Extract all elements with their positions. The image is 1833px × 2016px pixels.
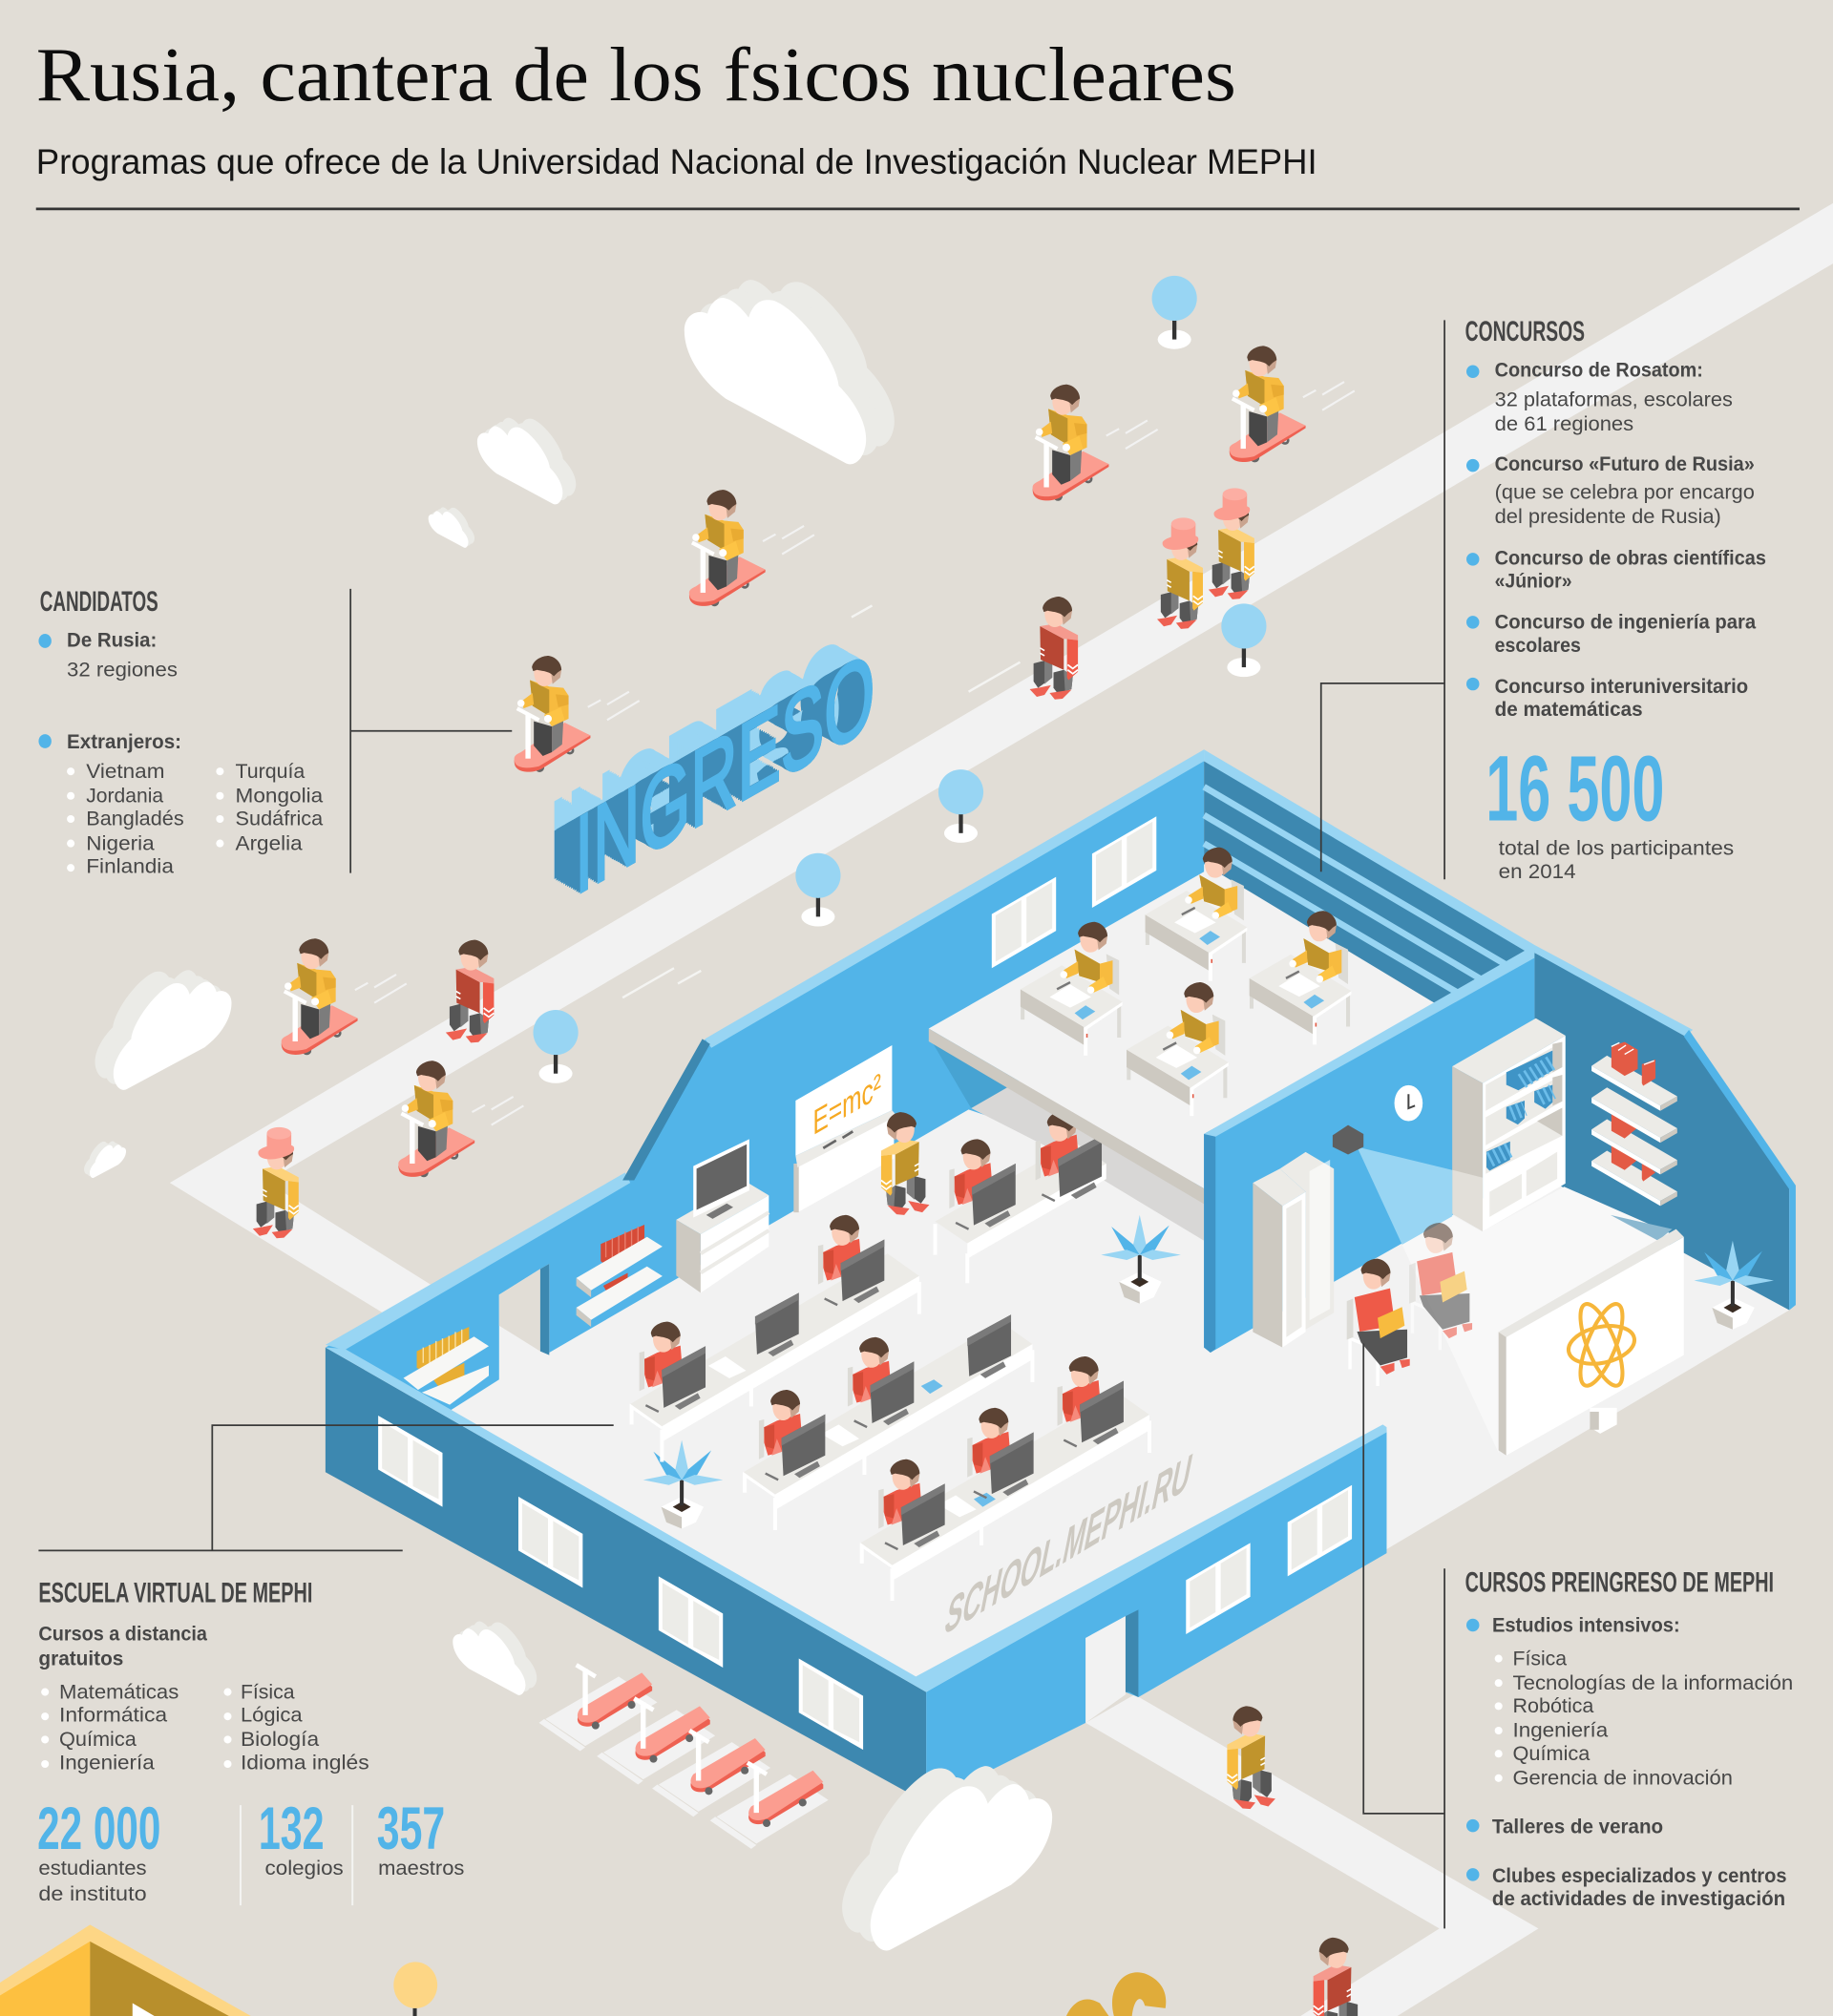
subject bullets xyxy=(1495,1655,1503,1782)
country list: Vietnam xyxy=(86,759,164,783)
intro: gratuitos xyxy=(38,1646,123,1670)
clock xyxy=(1395,1085,1422,1122)
INGRESO 3D lettering: INGRESO xyxy=(575,627,874,919)
rows of desks with students at computers xyxy=(630,1215,1149,1601)
number caption: en 2014 xyxy=(1499,859,1576,883)
contest list: Concurso de Rosatom: xyxy=(1495,358,1703,382)
panel: escuela virtual xyxy=(37,1577,464,1905)
yellow building xyxy=(0,1924,251,2016)
plant near the desks xyxy=(643,1440,723,1529)
subject list xyxy=(1513,1646,1793,1790)
subject list: Matemáticas xyxy=(59,1679,179,1703)
upper windows xyxy=(992,816,1156,968)
32 regiones: 32 regiones xyxy=(67,657,178,681)
subject list: Gerencia de innovación xyxy=(1513,1766,1733,1790)
De Rusia: De Rusia: xyxy=(67,628,157,652)
road to the building xyxy=(170,203,1833,1350)
TV on a chest xyxy=(676,1139,769,1292)
contest list: de matemáticas xyxy=(1495,697,1643,721)
front caps xyxy=(326,1348,1386,1692)
front right windows xyxy=(1186,1485,1352,1634)
contest list: Concurso «Futuro de Rusia» xyxy=(1495,452,1755,475)
Extranjeros: Extranjeros: xyxy=(67,729,181,753)
contest list: Concurso de ingeniería para xyxy=(1495,610,1757,634)
panel: candidatos xyxy=(38,586,323,878)
bullets xyxy=(1466,366,1479,690)
wall caps xyxy=(326,749,1204,1350)
subtitle: Programas que ofrece de la Universidad Nacional de Investigación Nuclear MEPHI xyxy=(36,141,1317,181)
contest list: Concurso interuniversitario xyxy=(1495,674,1748,698)
number caption: total de los participantes xyxy=(1499,836,1734,860)
projector and beam xyxy=(1333,1125,1452,1245)
shadow on floor below the upper floor xyxy=(971,1075,1204,1241)
big number: 16 500 xyxy=(1485,736,1664,840)
floor lettering: SCHOOL.MEPHI.RU xyxy=(940,1441,1197,1647)
stat 132: 132 xyxy=(259,1796,325,1862)
stat captions: colegios xyxy=(265,1856,344,1880)
intensive studies: Estudios intensivos: xyxy=(1492,1612,1680,1636)
yellow tree xyxy=(393,1962,437,2016)
subject list: Biología xyxy=(241,1727,319,1751)
subject list: Física xyxy=(241,1679,295,1703)
road from the door xyxy=(1085,1694,1538,2016)
front right wall xyxy=(926,1430,1386,1802)
country list: Mongolia xyxy=(236,783,323,807)
country list: Argelia xyxy=(236,830,303,854)
contest list: del presidente de Rusia) xyxy=(1495,504,1721,528)
walkers with red caps xyxy=(253,488,1254,1238)
heading: CANDIDATOS xyxy=(40,586,158,618)
floor xyxy=(326,752,1789,1692)
number caption xyxy=(1499,836,1734,883)
bookcase xyxy=(1452,1018,1566,1231)
red book shelves xyxy=(577,1225,663,1327)
back left wall xyxy=(326,752,1204,1411)
subject list: Ingeniería xyxy=(1513,1718,1608,1742)
trees along the road xyxy=(533,276,1266,1083)
main door xyxy=(1085,1616,1126,1723)
shadow on wall below the upper floor xyxy=(929,1037,1016,1108)
plant on the ground floor xyxy=(1101,1215,1181,1304)
parked scooters xyxy=(539,1665,829,1849)
stat captions: estudiantes xyxy=(38,1856,147,1880)
heading: ESCUELA VIRTUAL DE MEPHI xyxy=(38,1577,312,1608)
callout lines xyxy=(38,320,1444,1928)
bullets xyxy=(38,634,52,748)
intro xyxy=(38,1622,208,1670)
subject list: Química xyxy=(59,1727,137,1751)
subject list: Lógica xyxy=(241,1703,303,1727)
contest list xyxy=(1495,358,1766,721)
subject list: Informática xyxy=(59,1703,167,1727)
wall shelves with red books xyxy=(1591,1042,1677,1206)
blackboard E=mc2: E=mc² xyxy=(813,1066,881,1144)
stat 22 000: 22 000 xyxy=(37,1796,160,1862)
walker in yellow on the path xyxy=(1227,1706,1275,1809)
stat captions xyxy=(38,1856,464,1905)
front left wall xyxy=(326,1348,926,1802)
clubs: Clubes especializados y centros xyxy=(1492,1863,1787,1887)
stat captions: maestros xyxy=(378,1856,464,1880)
lit floor near the board xyxy=(1402,1186,1673,1453)
partition wall xyxy=(1204,950,1534,1353)
country list: Jordania xyxy=(86,783,163,807)
country list xyxy=(86,759,323,878)
board with atom emblem xyxy=(1499,1229,1684,1456)
seated reader in the back xyxy=(1409,1223,1472,1350)
subject list xyxy=(59,1679,369,1774)
subject list: Tecnologías de la información xyxy=(1513,1670,1793,1694)
clubs xyxy=(1492,1863,1787,1910)
shadow behind the board xyxy=(1611,1215,1673,1241)
country bullets xyxy=(67,767,223,872)
bullets xyxy=(1466,1619,1479,1881)
seated reader in the front xyxy=(1347,1259,1410,1386)
country list: Bangladés xyxy=(86,807,184,830)
title: Rusia, cantera de los fsicos nucleares xyxy=(36,32,1236,117)
subject list: Física xyxy=(1513,1646,1567,1670)
subject list: Ingeniería xyxy=(59,1750,155,1774)
heading: CONCURSOS xyxy=(1465,316,1585,347)
country list: Finlandia xyxy=(86,854,174,878)
stat 357: 357 xyxy=(377,1796,445,1862)
blackboard E=mc2 xyxy=(793,1045,896,1212)
upper floor students xyxy=(1021,848,1351,1116)
panel: concursos xyxy=(1465,316,1766,883)
country list: Sudáfrica xyxy=(236,807,323,830)
contest list: de 61 regiones xyxy=(1495,411,1633,435)
walkers in red xyxy=(446,597,1078,1042)
big cloud xyxy=(842,1766,1052,1950)
side door xyxy=(499,1269,540,1352)
country list: Nigeria xyxy=(86,830,155,854)
contest list: escolares xyxy=(1495,633,1581,657)
yellow letters at the bottom xyxy=(1066,1972,1166,2016)
clouds xyxy=(84,280,895,1695)
teacher xyxy=(881,1112,929,1215)
walker in red at the bottom xyxy=(1314,1938,1361,2016)
subject list: Robótica xyxy=(1513,1693,1593,1717)
stat dividers xyxy=(241,1805,352,1905)
back right wall with stripes xyxy=(1204,761,1534,1003)
front left windows xyxy=(378,1416,863,1750)
right wall xyxy=(1534,953,1789,1311)
contest list: «Júnior» xyxy=(1495,569,1571,593)
panel: cursos preingreso xyxy=(1465,1567,1793,1910)
subject list: Química xyxy=(1513,1741,1590,1765)
subject bullets xyxy=(41,1689,232,1768)
plant by the board xyxy=(1694,1241,1774,1330)
wardrobes xyxy=(1253,1152,1334,1348)
upper floor xyxy=(929,872,1434,1189)
clubs: de actividades de investigación xyxy=(1492,1886,1785,1910)
contest list: (que se celebra por encargo xyxy=(1495,480,1755,504)
intro: Cursos a distancia xyxy=(38,1622,208,1646)
subject list: Idioma inglés xyxy=(241,1750,369,1774)
under-floor row of desks xyxy=(936,1111,1106,1283)
stat captions: de instituto xyxy=(38,1881,147,1905)
contest list: Concurso de obras científicas xyxy=(1495,545,1766,569)
yellow book shelves xyxy=(404,1327,489,1405)
summer workshops: Talleres de verano xyxy=(1492,1815,1663,1838)
speed marks on the road xyxy=(622,605,1020,998)
scooter riders xyxy=(282,346,1355,1177)
building xyxy=(326,749,1796,1802)
contest list: 32 plataformas, escolares xyxy=(1495,388,1733,411)
country list: Turquía xyxy=(236,759,305,783)
